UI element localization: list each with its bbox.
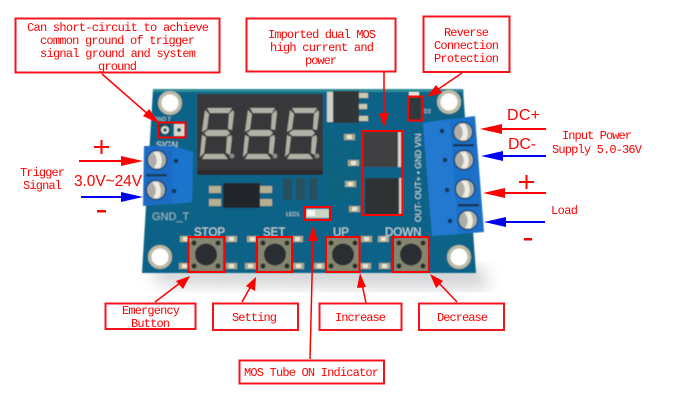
- board silk labels: SET: [263, 227, 285, 239]
- jumper pins: [159, 124, 185, 136]
- circuit board module: [142, 89, 484, 273]
- label: trigger signal: Signal: [23, 179, 62, 193]
- label: trigger voltage: 3.0V~24V: [74, 173, 143, 190]
- label: load: Load: [551, 204, 578, 218]
- board silk labels: STOP: [194, 227, 225, 239]
- board silk labels: UP: [333, 227, 349, 239]
- board silk labels: [152, 109, 431, 239]
- callout: MOS tube indicator: [240, 360, 384, 384]
- highlight: down button: [393, 237, 429, 272]
- arrow: increase: [357, 273, 366, 303]
- label: input power: [552, 129, 643, 157]
- callout: emergency button: Emergency: [122, 304, 180, 318]
- arrow: setting: [242, 277, 256, 302]
- right terminal block: [423, 116, 484, 236]
- callout: short-circuit: Can short-circuit to achieve: [27, 21, 209, 35]
- callout: dual MOS: [246, 18, 396, 72]
- symbol: trigger minus: [97, 210, 106, 212]
- status LED: [306, 209, 329, 218]
- callout: emergency button: Button: [131, 317, 170, 331]
- callout: short-circuit: ground: [98, 60, 137, 74]
- arrow: decrease: [430, 274, 457, 302]
- board silk labels: DOWN: [385, 227, 421, 239]
- highlight: stop button: [188, 237, 224, 272]
- callout: short-circuit: signal ground and system: [40, 47, 196, 61]
- callout: decrease: [419, 304, 504, 330]
- arrow: callout to MOS: [379, 72, 389, 127]
- label: DC plus: DC+: [507, 107, 540, 124]
- callout: dual MOS: Imported dual MOS: [268, 28, 376, 42]
- label: trigger signal: [20, 166, 65, 193]
- callout: setting: [213, 304, 298, 330]
- callout: short-circuit: [16, 18, 220, 74]
- arrow: trigger plus: [79, 156, 143, 166]
- left terminal block: [143, 146, 193, 206]
- symbol: trigger plus: [94, 140, 109, 154]
- highlight: LED: [305, 207, 330, 220]
- callout: reverse protection: Connection: [434, 39, 499, 53]
- callout: setting: Setting: [232, 311, 277, 325]
- label: input power: Input Power: [562, 129, 632, 143]
- callout: dual MOS: high current and: [270, 41, 374, 55]
- arrow: DC plus: [480, 124, 546, 134]
- arrow: load plus: [483, 188, 546, 198]
- optocoupler chip: [209, 183, 272, 208]
- label: DC minus: DC-: [508, 136, 536, 153]
- callout: emergency button: [106, 304, 196, 331]
- arrow: trigger minus: [81, 192, 143, 202]
- callout: reverse protection: [424, 16, 510, 72]
- callout: decrease: Decrease: [437, 311, 488, 325]
- label: input power: Supply 5.0-36V: [552, 143, 643, 157]
- highlight: MOSFETs: [362, 131, 402, 215]
- board shadow: [150, 266, 490, 288]
- board silk labels: SIGN: [156, 140, 178, 150]
- MOSFETs: [344, 132, 403, 215]
- symbol: load plus: [519, 175, 534, 189]
- board silk labels: D2: [424, 109, 431, 115]
- board silk labels: GND T: [154, 117, 172, 123]
- diode: [409, 92, 421, 120]
- arrow: emergency button: [155, 276, 190, 302]
- callout: reverse protection: Protection: [434, 52, 499, 66]
- arrow: DC minus: [481, 151, 546, 161]
- arrow: callout to diode: [427, 73, 462, 97]
- arrow: load minus: [484, 217, 545, 227]
- highlight: jumper pins: [158, 122, 186, 138]
- header pins: [283, 178, 318, 200]
- seven-segment display: [197, 94, 323, 175]
- callout: increase: Increase: [335, 311, 386, 325]
- board silk labels: LED1: [286, 212, 300, 218]
- mounting holes: [148, 90, 471, 269]
- highlight: set button: [257, 237, 292, 272]
- label: trigger signal: Trigger: [20, 166, 65, 180]
- board silk labels: OUT- OUT+ • GND VIN: [413, 133, 423, 222]
- arrow: MOS indicator: [308, 226, 318, 359]
- callout: dual MOS: power: [305, 54, 337, 68]
- push buttons: [179, 236, 428, 271]
- callout: reverse protection: Reverse: [444, 26, 489, 40]
- callout: MOS tube indicator: MOS Tube ON Indicator: [244, 366, 379, 380]
- callout: short-circuit: common ground of trigger: [40, 34, 195, 48]
- symbol: load minus: [524, 238, 532, 240]
- arrow: callout to jumper: [102, 74, 160, 124]
- board silk labels: GND_T: [152, 211, 190, 223]
- regulator chip: [327, 91, 368, 123]
- highlight: up button: [326, 237, 360, 272]
- highlight: diode: [408, 96, 422, 120]
- callout: increase: [320, 304, 402, 330]
